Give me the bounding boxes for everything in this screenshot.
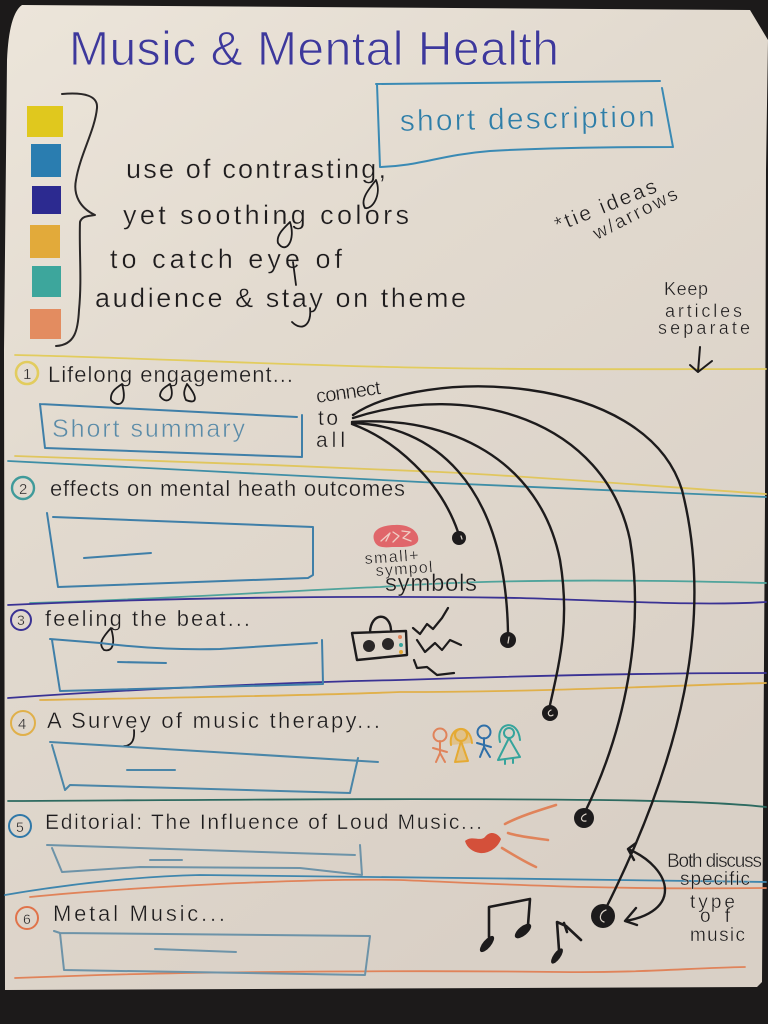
section 1 (16, 362, 302, 457)
title: Music & Mental Health (69, 23, 559, 76)
note: both discuss specific type of music: music (690, 925, 745, 946)
section 3 (11, 606, 323, 691)
connect to all label (315, 377, 382, 452)
heading 4 (47, 708, 380, 746)
heading 3: feeling the beat... (45, 606, 250, 631)
label: small symbols: symbols (385, 570, 477, 597)
number 5: 5 (16, 819, 24, 835)
note: keep articles separate: separate (658, 318, 750, 338)
label: small symbols (364, 547, 477, 597)
description text: audience & stay on theme (95, 283, 466, 313)
box 2 (47, 513, 313, 587)
icon: brain (374, 525, 418, 547)
heading 1 (48, 362, 293, 404)
summary box (40, 404, 302, 457)
note: both discuss specific type of music: Both discuss (667, 851, 762, 872)
heading 3 (45, 606, 250, 650)
icon: group of people (433, 725, 520, 764)
note: both discuss specific type of music: type (690, 892, 735, 913)
description text: to catch eye of (110, 244, 342, 274)
number 1 (16, 362, 38, 384)
icon: music notes (478, 899, 581, 965)
label: small symbols: small+ (364, 547, 419, 568)
number 4 (11, 711, 35, 735)
connect to all label: connect (315, 377, 382, 408)
section divider lines (5, 355, 766, 978)
colour swatches (27, 106, 63, 339)
label: small symbols: sympol (375, 559, 433, 580)
note: both discuss specific type of music: of (700, 906, 731, 927)
connecting arrows (352, 386, 694, 908)
number 2 (12, 477, 34, 499)
number 3 (11, 610, 31, 630)
short description box (376, 81, 673, 167)
note: both discuss specific type of music (667, 851, 762, 946)
section 5 (9, 811, 482, 875)
note: keep articles separate: articles (665, 301, 742, 321)
icon: lips with sound rays (465, 805, 556, 867)
sound waves (413, 608, 461, 675)
note: keep articles separate: Keep (664, 279, 708, 299)
description text (95, 154, 466, 327)
number 4: 4 (18, 716, 26, 733)
number 2: 2 (19, 481, 27, 498)
note: both discuss specific type of music: specific (680, 869, 750, 890)
box 5 (47, 845, 362, 875)
note: tie ideas with arrows: *tie ideas (551, 175, 660, 237)
number 3: 3 (17, 612, 25, 628)
number 1: 1 (23, 366, 31, 383)
double-headed arrow (625, 843, 665, 925)
heading 6: Metal Music... (53, 901, 225, 926)
arrow end dots (452, 531, 615, 928)
summary box: Short summary (52, 415, 246, 443)
note: tie ideas with arrows: w/arrows (589, 184, 681, 245)
number 6: 6 (23, 911, 31, 927)
heading 4: A Survey of music therapy... (47, 708, 380, 733)
section 4 (11, 708, 380, 793)
section 6 (16, 901, 370, 975)
note: keep articles separate (658, 279, 750, 372)
heading 5: Editorial: The Influence of Loud Music... (45, 811, 482, 834)
box 4 (50, 742, 378, 793)
connect to all label: all (316, 429, 345, 452)
description text: use of contrasting, (126, 154, 386, 184)
short description box: short description (400, 101, 655, 138)
heading 2: effects on mental heath outcomes (50, 476, 405, 501)
box 3 (50, 639, 323, 691)
section 2 (12, 476, 405, 587)
description text: yet soothing colors (123, 200, 409, 230)
icon: boombox (352, 608, 461, 675)
number 6 (16, 907, 38, 929)
connect to all label: to (318, 407, 338, 430)
number 5 (9, 815, 31, 837)
brace (56, 94, 97, 346)
heading 1: Lifelong engagement... (48, 362, 293, 387)
box 6 (54, 931, 370, 975)
